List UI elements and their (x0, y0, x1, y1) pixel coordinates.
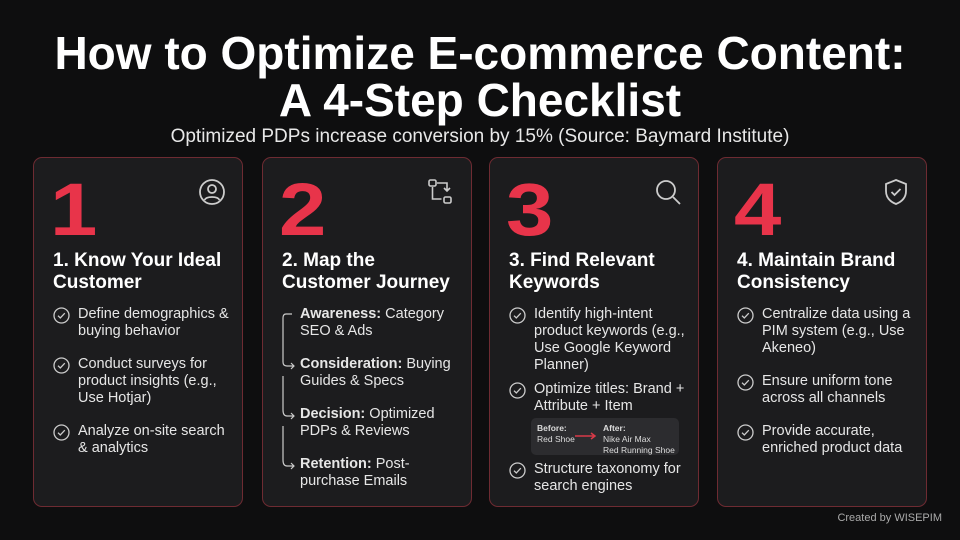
checklist: Structure taxonomy for search engines (534, 461, 681, 494)
journey list: Retention: Post-purchase Emails (300, 456, 410, 489)
title: How to Optimize E-commerce Content: (54, 27, 906, 79)
before/after example (531, 418, 679, 455)
checklist: Conduct surveys for product insights (e.g., Use Hotjar) (78, 356, 217, 406)
title: A 4-Step Checklist (279, 74, 681, 126)
heading: Customer Journey (282, 272, 450, 293)
checklist (737, 306, 910, 456)
before/after example: Before: (537, 423, 567, 433)
number 4: 4 (734, 168, 781, 251)
checklist: Provide accurate, enriched product data (762, 423, 902, 456)
journey list (282, 306, 451, 489)
heading (53, 250, 221, 293)
heading (509, 250, 655, 293)
before/after example: Red Running Shoe (603, 445, 675, 455)
checklist: Define demographics & buying behavior (78, 306, 229, 339)
heading (282, 250, 450, 293)
before/after example: Red Shoe (537, 434, 575, 444)
panel: step 1 (33, 157, 243, 507)
number 1: 1 (50, 168, 97, 251)
icon: user (199, 179, 225, 205)
number 2: 2 (279, 168, 326, 251)
heading: 4. Maintain Brand (737, 250, 895, 271)
heading: Keywords (509, 272, 600, 293)
title (54, 27, 906, 126)
footer credit: Created by WISEPIM (837, 512, 942, 524)
checklist: Optimize titles: Brand + Attribute + Item (534, 381, 684, 414)
heading (737, 250, 895, 293)
panel: step 4 (717, 157, 927, 507)
checklist: Ensure uniform tone across all channels (762, 373, 893, 406)
icon: flow (428, 179, 452, 204)
checklist: Identify high-intent product keywords (e.g., Use Google Keyword Planner) (534, 306, 685, 373)
icon: search (656, 180, 681, 205)
heading: Customer (53, 272, 142, 293)
checklist: Centralize data using a PIM system (e.g., Use Akeneo) (762, 306, 910, 356)
heading: Consistency (737, 272, 850, 293)
subtitle: Optimized PDPs increase conversion by 15% (Source: Baymard Institute) (171, 126, 789, 147)
checklist: Analyze on-site search & analytics (78, 423, 225, 456)
number 3: 3 (506, 168, 553, 251)
checklist (509, 306, 685, 494)
journey list: Awareness: Category SEO & Ads (300, 306, 444, 339)
heading: 1. Know Your Ideal (53, 250, 221, 271)
panel: step 3 (489, 157, 699, 507)
before/after example: Nike Air Max (603, 434, 651, 444)
heading: 3. Find Relevant (509, 250, 655, 271)
journey list: Consideration: Buying Guides & Specs (300, 356, 451, 389)
panel: step 2 (262, 157, 472, 507)
journey list: Decision: Optimized PDPs & Reviews (300, 406, 435, 439)
before/after example: After: (603, 423, 626, 433)
checklist (53, 306, 229, 456)
heading: 2. Map the (282, 250, 375, 271)
icon: shield (885, 179, 907, 205)
